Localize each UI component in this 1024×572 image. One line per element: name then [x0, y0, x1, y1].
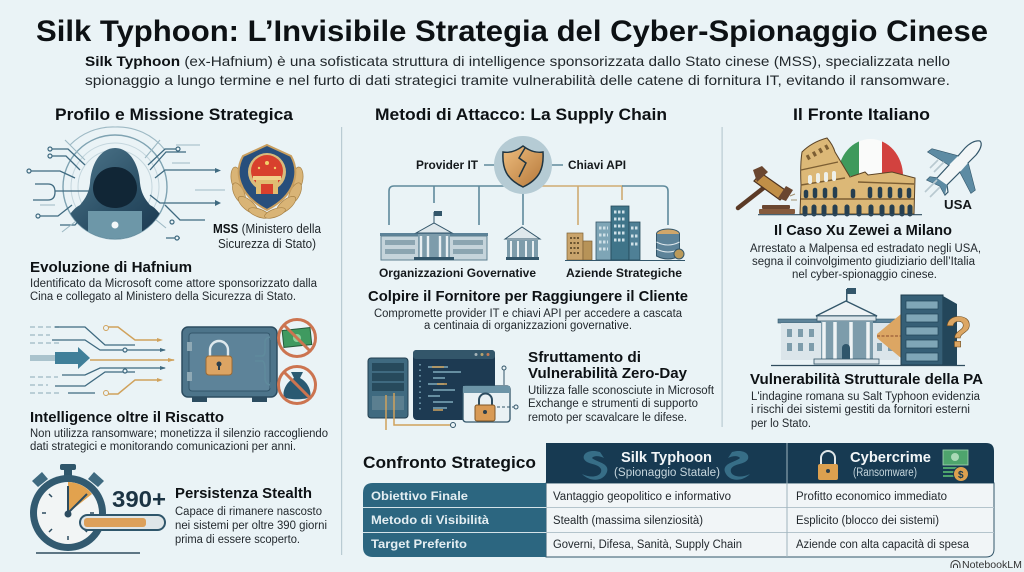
cells: silk typhoon [553, 491, 742, 551]
block: Sfruttamento Zero-Day: Vulnerabilità Zero-Day [528, 365, 688, 382]
label: USA: USA [944, 197, 973, 212]
label: Organizzazioni Governative: Organizzazioni Governative [379, 266, 536, 280]
icon: stopwatch with progress [30, 464, 165, 553]
block: Il Caso Xu Zewei: Il Caso Xu Zewei a Milano [774, 222, 952, 239]
heading: confronto: Confronto Strategico [363, 454, 536, 472]
cells: cybercrime: Esplicito (blocco dei sistemi) [796, 515, 939, 527]
block: Il Caso Xu Zewei [750, 222, 981, 281]
icon: dragon left [582, 451, 607, 480]
intro text [85, 53, 950, 88]
block: Evoluzione di Hafnium [30, 259, 318, 303]
block: Colpire il Fornitore: Compromette provider IT e chiavi API per accedere a cascata [374, 308, 683, 320]
block: Persistenza Stealth: prima di essere scoperto. [175, 534, 300, 546]
block: Evoluzione di Hafnium: Identificato da Microsoft come attore sponsorizzato dalla [30, 278, 318, 290]
heading: metodi: Metodi di Attacco: La Supply Chain [375, 105, 667, 124]
block: Sfruttamento Zero-Day: Utilizza falle sconosciute in Microsoft [528, 385, 715, 397]
icon: no money [278, 320, 316, 356]
label: MSS [213, 221, 322, 251]
row labels: Target Preferito [371, 537, 467, 551]
icon: public building with server: ? [945, 308, 972, 357]
intro text: spionaggio a lungo termine e nel furto di dati strategici tramite vulnerabilità delle catene di fornitura IT, evitando il ransomware. [85, 72, 950, 88]
icon: data flows into vault [30, 326, 277, 402]
block: Evoluzione di Hafnium: Cina e collegato al Ministero della Sicurezza di Stato. [30, 291, 296, 303]
block: Intelligence oltre il Riscatto: Non utilizza ransomware; monetizza il silenzio raccogliendo [30, 428, 328, 440]
block: Il Caso Xu Zewei: nel cyber-spionaggio cinese. [792, 269, 937, 281]
block: Persistenza Stealth [175, 486, 327, 546]
block: Vulnerabilità Strutturale: i rischi dei sistemi gestiti da fornitori esterni [751, 404, 970, 416]
table body [546, 483, 994, 557]
block: Sfruttamento Zero-Day: Sfruttamento di [528, 349, 641, 366]
panel: confronto strategico [363, 443, 994, 557]
block: Il Caso Xu Zewei: Arrestato a Malpensa ed estradato negli USA, [750, 243, 981, 255]
diagram: supply chain connectors [389, 165, 668, 225]
heading: profilo: Profilo e Missione Strategica [55, 105, 294, 124]
block: Vulnerabilità Strutturale: L'indagine romana su Salt Typhoon evidenzia [751, 391, 981, 403]
block: Intelligence oltre il Riscatto: dati strategici e monitorando comunicazioni per anni. [30, 441, 296, 453]
block: Vulnerabilità Strutturale: per lo Stato. [751, 418, 811, 430]
cells: silk typhoon: Vantaggio geopolitico e informativo [553, 491, 731, 503]
block: Colpire il Fornitore [368, 288, 688, 332]
icon: hooded hacker [27, 127, 225, 245]
cells: cybercrime: Profitto economico immediato [796, 491, 947, 503]
panel: il fronte italiano [738, 105, 983, 430]
block: Intelligence oltre il Riscatto: Intelligence oltre il Riscatto [30, 409, 224, 426]
icon: gavel [738, 166, 797, 214]
header: Cybercrime: (Ransomware) [853, 467, 917, 479]
heading: fronte italiano: Il Fronte Italiano [793, 105, 930, 124]
row labels: Metodo di Visibilità [371, 513, 489, 527]
cells: silk typhoon: Governi, Difesa, Sanità, Supply Chain [553, 539, 742, 551]
icon: colosseum [800, 138, 915, 214]
block: Colpire il Fornitore: Colpire il Fornitore per Raggiungere il Cliente [368, 288, 688, 305]
icon: MSS emblem [230, 145, 304, 221]
label: MSS: Sicurezza di Stato) [218, 236, 316, 251]
watermark: NotebookLM: NotebookLM [962, 559, 1022, 571]
cells: silk typhoon: Stealth (massima silenziosità) [553, 515, 703, 527]
block: Sfruttamento Zero-Day [528, 349, 715, 424]
block: Intelligence oltre il Riscatto [30, 409, 328, 453]
block: Persistenza Stealth: Persistenza Stealth [175, 486, 312, 502]
label: Aziende Strategiche: Aziende Strategiche [566, 266, 682, 280]
row labels [363, 483, 546, 557]
block: Sfruttamento Zero-Day: remoto per scavalcare le difese. [528, 412, 687, 424]
icon: broken shield [494, 136, 552, 194]
icon: airplane [925, 141, 981, 197]
icon: small temple [505, 227, 540, 260]
icon: server, code and lock [368, 350, 518, 430]
panel: metodi di attacco [368, 105, 715, 430]
header: Silk Typhoon [614, 449, 720, 479]
icon: dragon right [725, 451, 750, 480]
block: Sfruttamento Zero-Day: Exchange e strumenti di supporto [528, 398, 698, 410]
icon: corporate buildings [565, 206, 685, 260]
row labels: Obiettivo Finale [371, 489, 468, 503]
cells: cybercrime: Aziende con alta capacità di spesa [796, 539, 970, 551]
icon: padlock [818, 451, 838, 480]
intro text: Silk Typhoon (ex-Hafnium) è una sofisticata struttura di intelligence sponsorizzata dallo Stato cinese (MSS), specializzata nello [85, 53, 950, 69]
header: Cybercrime: Cybercrime [850, 449, 931, 466]
block: Colpire il Fornitore: a centinaia di organizzazioni governative. [424, 320, 632, 332]
icon: government building [380, 211, 488, 260]
header: Cybercrime [850, 449, 931, 479]
block: Persistenza Stealth: Capace di rimanere nascosto [175, 506, 322, 518]
block: Vulnerabilità Strutturale: Vulnerabilità Strutturale della PA [750, 371, 983, 388]
block: Evoluzione di Hafnium: Evoluzione di Hafnium [30, 259, 192, 276]
block: Persistenza Stealth: nei sistemi per oltre 390 giorni [175, 520, 327, 532]
icon: money [943, 450, 968, 482]
icon: italian flag [838, 139, 904, 177]
block: Il Caso Xu Zewei: segna il coinvolgimento giudiziario dell’Italia [752, 256, 976, 268]
label: Provider IT: Provider IT [416, 158, 479, 172]
label: MSS: MSS (Ministero della [213, 221, 322, 236]
icon: no money bag [278, 366, 316, 404]
panel: profilo e missione [27, 105, 328, 553]
icon: money: $ [958, 470, 964, 481]
stat: 390+: 390+ [112, 486, 166, 512]
header: Silk Typhoon: (Spionaggio Statale) [614, 467, 720, 479]
title: Silk Typhoon: L’Invisibile Strategia del Cyber-Spionaggio Cinese [36, 15, 988, 48]
icon: public building with server [771, 288, 972, 366]
header: Silk Typhoon: Silk Typhoon [621, 449, 712, 466]
table header [546, 443, 994, 483]
label: Chiavi API: Chiavi API [568, 158, 626, 172]
block: Vulnerabilità Strutturale [750, 371, 983, 430]
cells: cybercrime [796, 491, 970, 551]
